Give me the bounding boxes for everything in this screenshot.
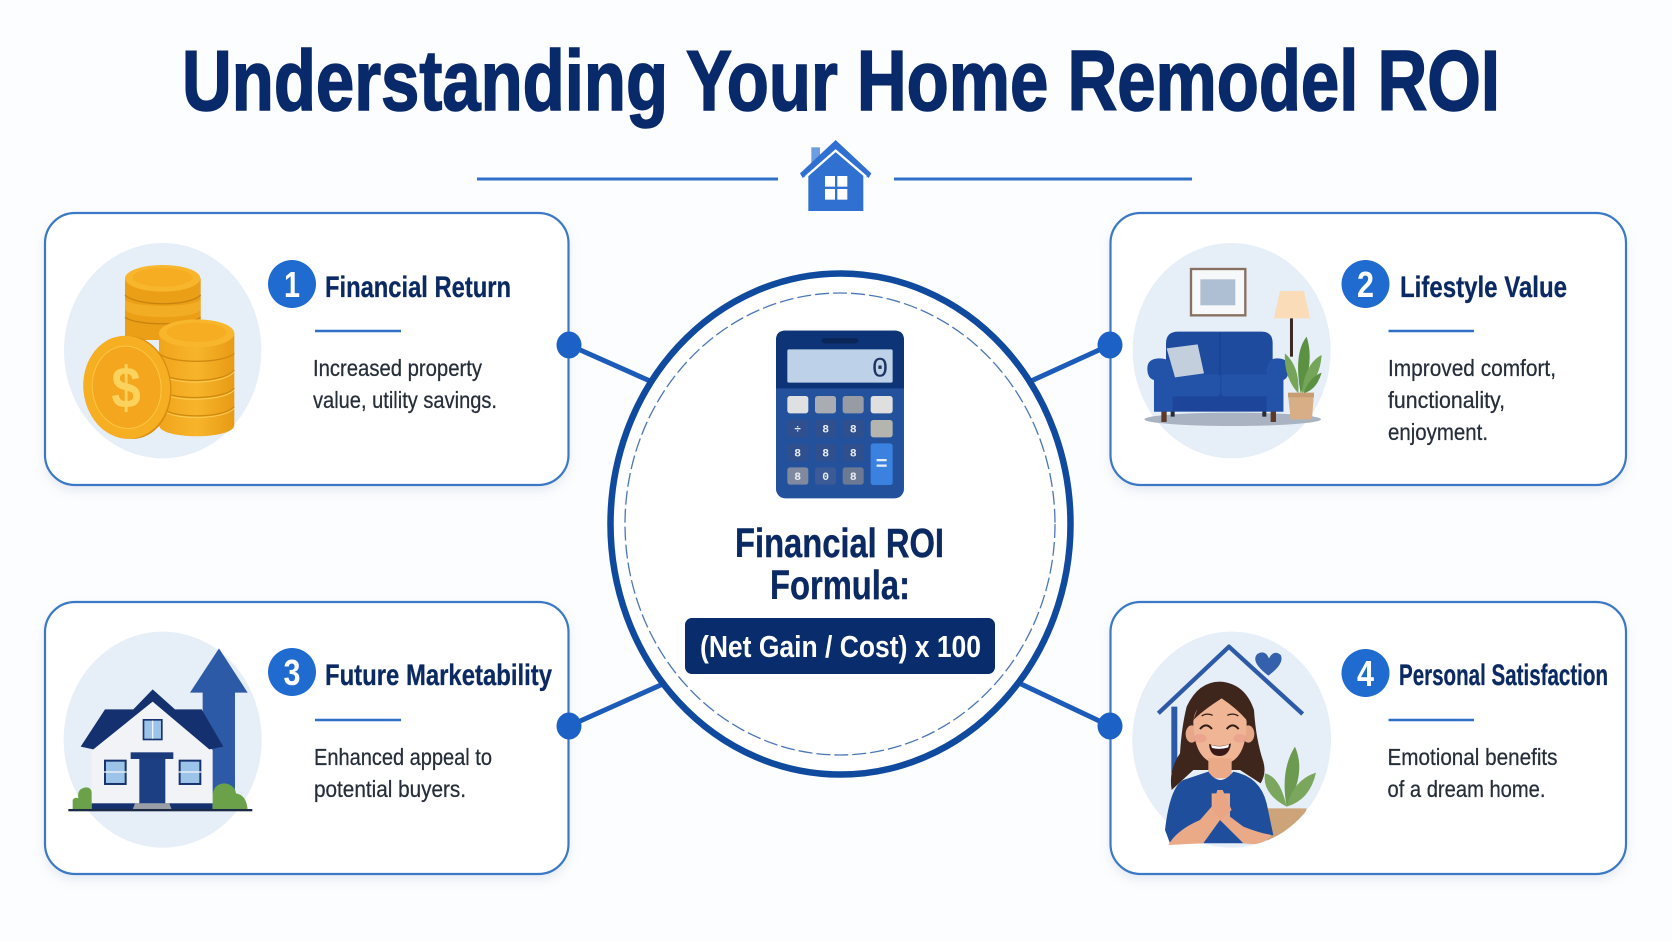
icon: house <box>800 140 871 211</box>
formula heading: Formula: <box>770 562 910 608</box>
card body: Enhanced appeal to <box>314 744 492 770</box>
formula pill <box>685 618 995 674</box>
icon: calculator: 8 <box>794 472 801 484</box>
number badge 3 <box>268 648 316 696</box>
panel: Lifestyle Value <box>1110 213 1626 485</box>
card body: Increased property <box>313 355 482 381</box>
card heading: Lifestyle Value <box>1400 271 1567 304</box>
card rule <box>315 330 401 332</box>
title divider left <box>477 178 778 180</box>
icon: calculator: 0 <box>872 355 888 386</box>
dollar sign: $ <box>111 356 141 421</box>
connector: card 2 to circle <box>1031 345 1110 381</box>
icon: calculator <box>776 331 904 498</box>
card body: enjoyment. <box>1388 419 1488 445</box>
number badge 2 <box>1342 260 1390 308</box>
formula heading: Financial ROI <box>735 520 944 566</box>
card heading: Financial Return <box>325 271 511 304</box>
card body: potential buyers. <box>314 776 466 802</box>
icon: calculator: 8 <box>822 448 829 460</box>
icon: calculator: 8 <box>850 472 857 484</box>
number badge 4 <box>1342 649 1390 697</box>
number badge 2: 2 <box>1357 264 1374 305</box>
icon: living room <box>1133 243 1331 458</box>
connector dot 2 <box>1098 332 1122 358</box>
icon: calculator: 8 <box>850 448 857 460</box>
card body: of a dream home. <box>1388 776 1546 802</box>
connector: card 4 to circle <box>1021 684 1110 726</box>
card body <box>314 744 492 802</box>
icon: house with rising arrow <box>64 632 262 848</box>
connector dot 4 <box>1098 712 1122 740</box>
icon: coins <box>64 243 261 458</box>
card body <box>1388 355 1556 445</box>
formula pill: (Net Gain / Cost) x 100 <box>700 629 981 664</box>
card body <box>1388 744 1558 802</box>
card body: Emotional benefits <box>1388 744 1558 770</box>
title divider right <box>894 178 1192 180</box>
number badge 3: 3 <box>284 652 300 693</box>
icon: calculator: 0 <box>822 472 829 484</box>
panel: Financial Return <box>45 213 568 485</box>
panel: Personal Satisfaction <box>1110 602 1626 874</box>
icon: happy homeowner <box>1132 632 1331 848</box>
icon: calculator: 8 <box>822 424 829 436</box>
panel: central formula circle <box>610 274 1070 774</box>
card body: value, utility savings. <box>313 387 497 413</box>
icon: calculator: ÷ <box>794 424 801 436</box>
card rule <box>315 719 401 721</box>
connector dot 1 <box>556 332 582 358</box>
card heading: Future Marketability <box>325 659 552 692</box>
card body <box>313 355 497 413</box>
card rule <box>1388 330 1474 332</box>
card body: functionality, <box>1388 387 1505 413</box>
number badge 1 <box>268 260 316 308</box>
card rule <box>1388 719 1474 721</box>
icon: calculator: = <box>876 454 888 477</box>
icon: calculator: 8 <box>850 424 857 436</box>
formula heading <box>735 520 944 608</box>
connector: card 3 to circle <box>569 684 663 726</box>
card body: Improved comfort, <box>1388 355 1556 381</box>
icon: calculator: 8 <box>794 448 801 460</box>
connector dot 3 <box>556 712 582 740</box>
panel: Future Marketability <box>45 602 568 874</box>
number badge 1: 1 <box>284 264 300 305</box>
connector: card 1 to circle <box>569 345 650 381</box>
number badge 4: 4 <box>1357 653 1374 694</box>
